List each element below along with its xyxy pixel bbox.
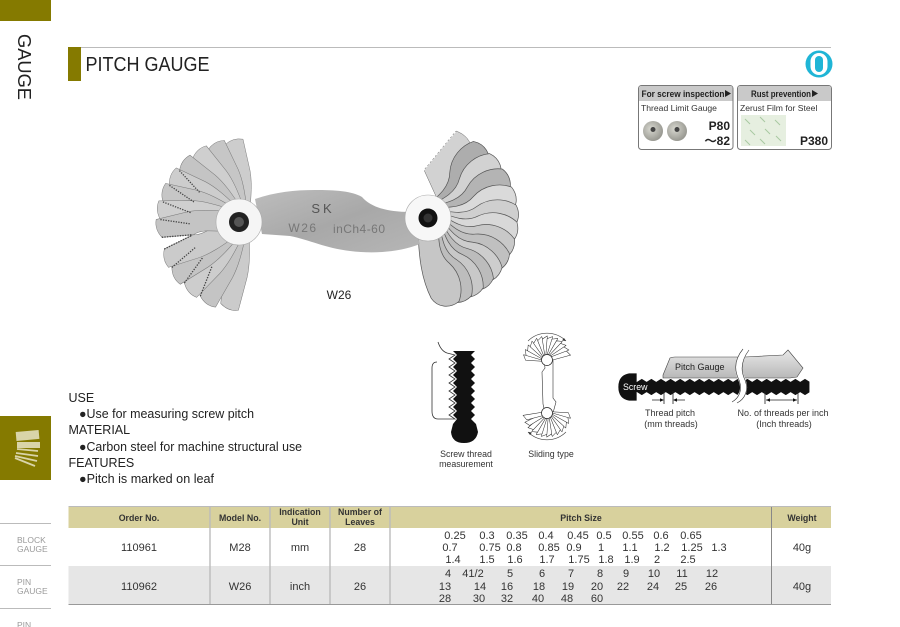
table header: Model No. — [219, 513, 261, 523]
row: 110962: 41/2 — [462, 568, 484, 580]
spec text: use, material, features: ●Use for measuring screw pitch — [79, 407, 254, 421]
diagram: screw thread measurement: measurement — [439, 459, 493, 469]
sidebar navigation: GAUGE — [17, 544, 48, 554]
title heading: PITCH GAUGE — [86, 54, 210, 76]
diagram: pitch gauge on screw: (Inch threads) — [756, 419, 812, 429]
row: 110962: 26 — [354, 581, 366, 593]
diagram: pitch gauge on screw: Pitch Gauge — [675, 362, 725, 372]
row: 110962: 13 — [439, 581, 451, 593]
spec text: use, material, features: ●Pitch is marked on leaf — [79, 472, 215, 486]
row: 110961: 1.25 — [681, 542, 703, 554]
row: 110961: 1.4 — [445, 554, 461, 566]
row: 110962: 40 — [532, 593, 544, 605]
gauge blade — [663, 350, 803, 378]
icon: blue zero badge — [806, 50, 832, 78]
diagram: screw thread measurement — [432, 342, 493, 469]
diagram: pitch gauge on screw: Thread pitch — [645, 408, 695, 418]
spec text: use, material, features: ●Carbon steel for machine structural use — [79, 440, 302, 454]
row: 110961: 1.7 — [539, 554, 555, 566]
diagram: pitch gauge on screw: (mm threads) — [644, 419, 698, 429]
diagram: screw thread measurement: Screw thread — [440, 449, 492, 459]
sidebar title: GAUGE: GAUGE — [14, 34, 35, 100]
toothed top leaf — [424, 131, 472, 205]
row: 110962: inch — [290, 581, 310, 593]
row: 110961: 0.85 — [538, 542, 560, 554]
diagram: sliding type: Sliding type — [528, 449, 574, 459]
row: 110961: mm — [291, 542, 309, 554]
row: 110961: M28 — [229, 542, 251, 554]
title heading — [68, 47, 831, 81]
card: for screw inspection: ～82 — [705, 134, 730, 148]
row: 110961: 0.65 — [680, 530, 702, 542]
table header: Order No. — [119, 513, 159, 523]
left leaf fan — [155, 138, 251, 311]
row: 110962: 11 — [676, 568, 688, 580]
table header: Leaves — [345, 517, 375, 527]
row: 110961: 1.6 — [507, 554, 523, 566]
row: 110962: 26 — [705, 581, 717, 593]
row: 110961: 2.5 — [680, 554, 696, 566]
table header: Unit — [291, 517, 309, 527]
row: 110962: 60 — [591, 593, 603, 605]
screw — [618, 373, 810, 401]
left knob — [216, 199, 262, 245]
row: 110961: 0.75 — [479, 542, 501, 554]
row: 110961: 0.55 — [622, 530, 644, 542]
table header: Number of — [338, 507, 382, 517]
card: rust prevention: P380 — [800, 134, 828, 148]
row: 110962: 10 — [648, 568, 660, 580]
row: 110961: 0.9 — [566, 542, 582, 554]
sidebar navigation — [0, 523, 51, 627]
row: 110962: 5 — [507, 568, 513, 580]
sidebar navigation: BLOCK — [17, 535, 46, 545]
row: 110961: 1.2 — [654, 542, 670, 554]
spec table — [68, 506, 831, 605]
product photo: pitch gauge W26: inCh4-60 — [333, 222, 385, 236]
row: 110961: 110961 — [121, 542, 157, 554]
right leaf fan — [411, 136, 521, 309]
row: 110961: 28 — [354, 542, 366, 554]
table header — [68, 506, 831, 528]
spec text: use, material, features: USE — [68, 391, 94, 405]
table header: Weight — [787, 513, 817, 523]
row: 110962: W26 — [229, 581, 251, 593]
row shading — [68, 566, 831, 604]
diagram: pitch gauge on screw: No. of threads per inch — [737, 408, 829, 418]
card: rust prevention: Rust prevention — [751, 89, 811, 99]
card: for screw inspection: For screw inspection — [642, 89, 724, 99]
row: 110962: 40g — [793, 581, 811, 593]
card: rust prevention — [738, 86, 832, 150]
row: 110961: 1 — [598, 542, 604, 554]
row: 110961: 1.9 — [624, 554, 640, 566]
table header: Pitch Size — [560, 513, 602, 523]
row: 110962: 28 — [439, 593, 451, 605]
sidebar navigation: PIN — [17, 577, 31, 587]
row: 110961: 0.7 — [442, 542, 458, 554]
sidebar navigation: GAUGE — [17, 586, 48, 596]
row: 110962: 20 — [591, 581, 603, 593]
spec text: use, material, features: MATERIAL — [68, 423, 130, 437]
card: for screw inspection: Thread Limit Gauge — [641, 103, 717, 113]
product photo: pitch gauge W26: SK — [311, 201, 335, 216]
row: 110961: 0.6 — [653, 530, 669, 542]
row: 110962 — [121, 568, 811, 605]
row: 110961: 1.8 — [598, 554, 614, 566]
product photo: pitch gauge W26 — [155, 130, 521, 311]
row: 110962: 8 — [597, 568, 603, 580]
card: for screw inspection: P80 — [709, 119, 730, 133]
row: 110961: 1.75 — [568, 554, 590, 566]
row: 110962: 18 — [533, 581, 545, 593]
product photo: pitch gauge W26: W26 — [288, 221, 318, 235]
row: 110962: 19 — [562, 581, 574, 593]
row: 110961: 40g — [793, 542, 811, 554]
row: 110961: 0.45 — [567, 530, 589, 542]
row: 110961: 0.25 — [444, 530, 466, 542]
row: 110962: 32 — [501, 593, 513, 605]
row: 110961: 0.3 — [479, 530, 495, 542]
gauge body — [255, 190, 420, 252]
row: 110961: 0.5 — [596, 530, 612, 542]
row: 110962: 48 — [561, 593, 573, 605]
row: 110961: 2 — [654, 554, 660, 566]
diagram: pitch gauge on screw — [618, 349, 829, 429]
row: 110961: 0.35 — [506, 530, 528, 542]
table header: Indication — [279, 507, 321, 517]
row: 110962: 14 — [474, 581, 486, 593]
row: 110961: 1.3 — [711, 542, 727, 554]
spec text: use, material, features — [68, 391, 302, 486]
sidebar tab — [0, 0, 51, 21]
row: 110962: 24 — [647, 581, 659, 593]
diagram: sliding type — [523, 333, 574, 459]
sidebar active icon block — [0, 416, 51, 480]
row: 110962: 22 — [617, 581, 629, 593]
row: 110962: 30 — [473, 593, 485, 605]
row: 110961: 1.1 — [622, 542, 638, 554]
photo label: W26: W26 — [327, 288, 352, 302]
card: rust prevention: Zerust Film for Steel — [740, 103, 817, 113]
row: 110962: 4 — [445, 568, 451, 580]
row: 110962: 6 — [539, 568, 545, 580]
row: 110961: 1.5 — [479, 554, 495, 566]
row: 110962: 12 — [706, 568, 718, 580]
row: 110961 — [121, 530, 811, 566]
spec text: use, material, features: FEATURES — [68, 456, 134, 470]
card: for screw inspection — [638, 86, 733, 150]
row: 110962: 110962 — [121, 581, 157, 593]
dimension arrows — [652, 391, 798, 404]
row: 110962: 25 — [675, 581, 687, 593]
row: 110961: 0.8 — [506, 542, 522, 554]
row: 110962: 7 — [568, 568, 574, 580]
diagram: pitch gauge on screw: Screw — [623, 382, 648, 392]
row: 110962: 9 — [623, 568, 629, 580]
break mark — [734, 350, 746, 402]
row: 110961: 0.4 — [538, 530, 554, 542]
row: 110962: 16 — [501, 581, 513, 593]
right knob — [405, 195, 451, 241]
